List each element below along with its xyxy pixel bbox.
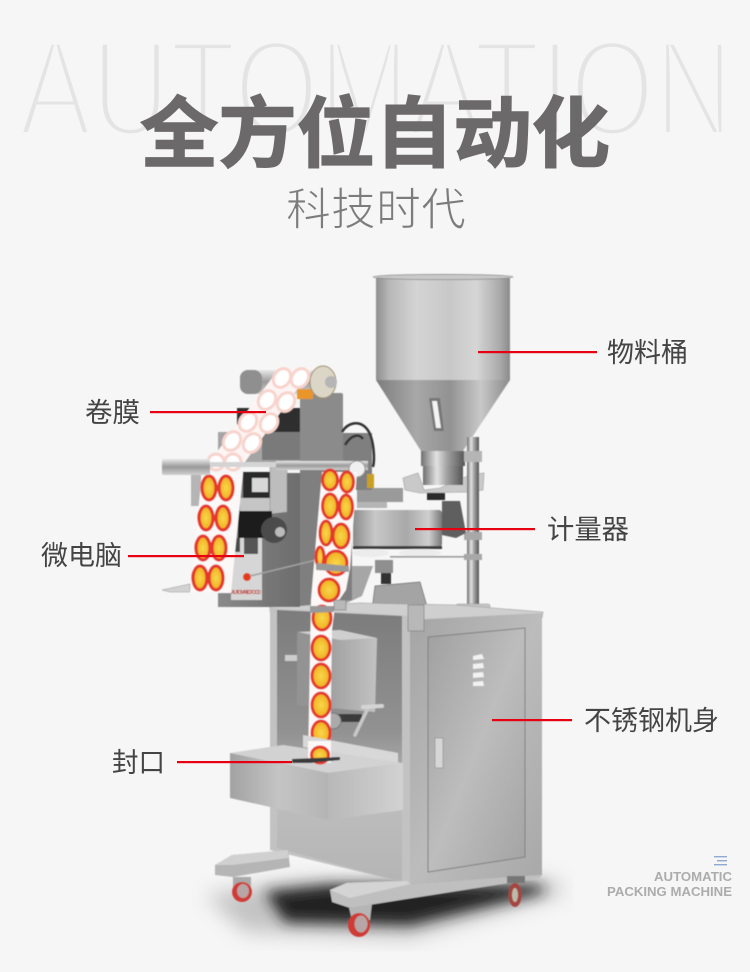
right cabinet body [410,613,542,884]
callout: 封口: 封口 [112,748,165,778]
upper control section: AUTOMATIC FOOD [231,590,261,596]
forming box [297,630,377,712]
front foot and caster [330,875,542,937]
dosing unit [340,488,466,628]
callout: 微电脑: 微电脑 [41,541,122,571]
upper control section [162,393,374,607]
horizontal guide bar [162,459,368,477]
packing machine illustration [162,274,565,938]
callout: 计量器: 计量器 [547,515,629,545]
brand caption: PACKING MACHINE [607,884,732,899]
hinge brackets [334,600,424,631]
film roller [240,366,337,399]
door latch [435,738,443,768]
wire loom [342,423,374,467]
hopper [373,274,513,493]
icon: menu lines [714,856,727,865]
brand caption: AUTOMATIC [654,869,733,884]
cabinet top plate [270,603,543,622]
collecting tray [230,735,403,820]
lever and handwheel [325,706,382,735]
callout: 不锈钢机身: 不锈钢机身 [584,706,719,736]
left foot and caster [215,850,290,902]
vent slots [473,654,484,686]
left frame and inner panel [270,608,410,884]
callout: 物料桶: 物料桶 [607,338,688,368]
film roll strip: left [190,365,313,593]
callout: 卷膜: 卷膜 [85,398,140,428]
cabinet door [428,628,525,872]
subtitle: 科技时代 [286,184,466,235]
rear caster [507,876,525,907]
heater window [243,472,271,498]
title: 全方位自动化 [140,92,610,178]
control panel [231,538,262,600]
sealing roller [238,511,272,538]
support column [456,437,490,611]
brand caption [607,869,733,899]
floor shadow [205,880,565,938]
film roll strip: right [308,470,357,765]
